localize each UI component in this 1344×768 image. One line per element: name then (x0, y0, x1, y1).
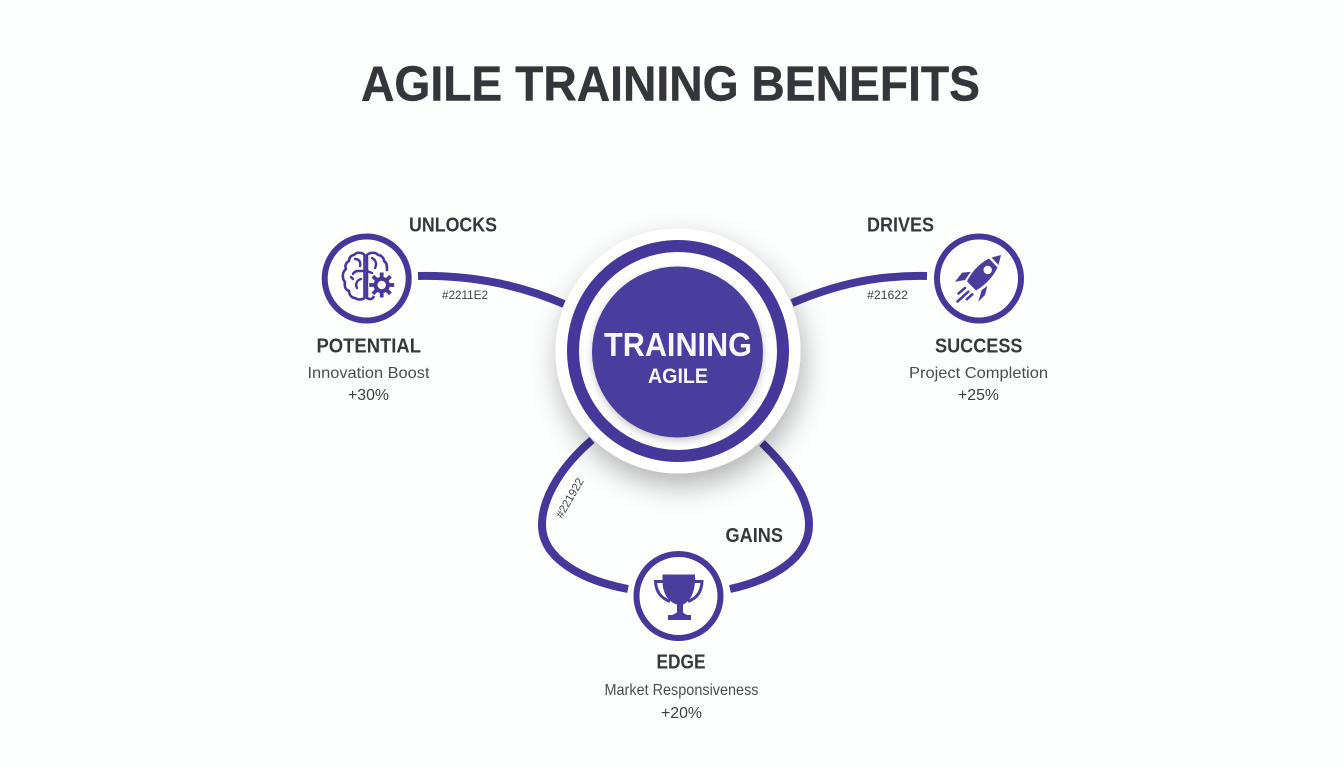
connector: potential to center (418, 276, 564, 304)
description: potential: Innovation Boost (308, 365, 430, 382)
value: potential: +30% (348, 387, 389, 404)
hub ring (573, 246, 783, 456)
node: edge (604, 554, 758, 722)
node: potential (308, 236, 430, 404)
node: success (909, 236, 1048, 404)
small code: left connector: #2211E2 (442, 290, 488, 302)
value: success: +25% (958, 387, 999, 404)
connector: center to edge, left (542, 440, 628, 589)
icon: rocket (937, 236, 1021, 320)
title: AGILE TRAINING BENEFITS (361, 57, 980, 112)
label: unlocks: UNLOCKS (409, 214, 497, 236)
central hub (556, 228, 800, 474)
label: gains: GAINS (726, 525, 783, 547)
description: edge: Market Responsiveness (604, 682, 758, 699)
small code: right connector: #21622 (867, 290, 908, 302)
hub inner disc (592, 266, 763, 438)
description: success: Project Completion (909, 365, 1048, 382)
hub heading: TRAINING (604, 326, 752, 363)
value: edge: +20% (661, 705, 702, 722)
connector: success to center (792, 276, 927, 303)
icon: trophy (636, 554, 720, 638)
heading: success: SUCCESS (935, 336, 1022, 358)
connector: center to edge, right (730, 443, 809, 589)
small code: bottom connector: #221922 (554, 476, 587, 520)
hub subheading: AGILE (648, 365, 708, 388)
heading: edge: EDGE (656, 652, 706, 674)
label: drives: DRIVES (867, 214, 934, 236)
heading: potential: POTENTIAL (316, 336, 421, 358)
icon: brain with gear (325, 236, 409, 320)
hub white disc (556, 228, 800, 474)
